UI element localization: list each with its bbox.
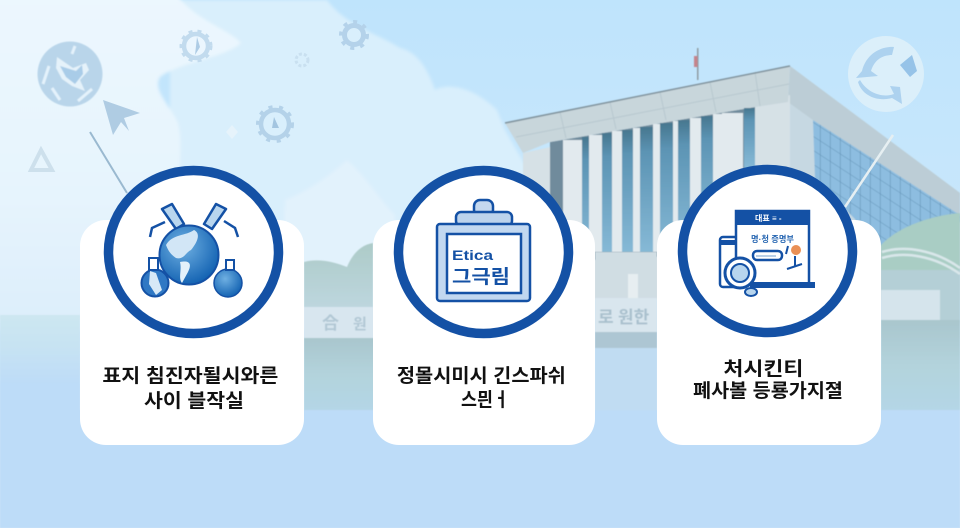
icon: document with magnifier bbox=[720, 211, 815, 296]
card body bbox=[373, 220, 595, 445]
lawn right bbox=[881, 320, 960, 410]
icon: globe network bbox=[38, 42, 102, 106]
trees left bbox=[304, 243, 373, 307]
roof grid bbox=[516, 72, 789, 138]
icon: clipboard sign: Etica bbox=[452, 247, 493, 263]
card body bbox=[80, 220, 304, 445]
icon: gear compass bbox=[181, 31, 211, 61]
lawn middle bbox=[595, 348, 657, 410]
sign band left bbox=[304, 307, 374, 338]
icon: faint diamond bbox=[226, 125, 238, 139]
lower scene: 원한 bbox=[618, 308, 650, 327]
glass panels bbox=[582, 108, 755, 252]
lower scene: 合 bbox=[322, 314, 339, 333]
ring bbox=[682, 170, 852, 332]
lawn left bbox=[304, 338, 374, 410]
base shadow middle bbox=[595, 332, 657, 348]
icon: faint gear bbox=[296, 54, 308, 66]
side roof band bbox=[788, 66, 960, 215]
card 1 text: 표지 침진자될시와른 bbox=[102, 365, 278, 387]
icon: document with magnifier: 대표 ≡ - bbox=[755, 213, 782, 223]
card 2 text: 정몰시미시 긴스파쉬 bbox=[397, 365, 566, 387]
building base middle bbox=[595, 252, 657, 298]
side windows bbox=[813, 120, 960, 255]
sign band right bbox=[881, 290, 940, 320]
icon: recycle badge bbox=[848, 36, 924, 112]
roof front bbox=[505, 66, 790, 153]
connector line right bbox=[845, 135, 893, 207]
building side wall bbox=[790, 66, 960, 300]
icon: clipboard sign bbox=[437, 200, 530, 301]
ring bbox=[398, 170, 568, 334]
lower scene: 원 bbox=[353, 316, 367, 333]
blue ground middle bbox=[80, 410, 960, 528]
blue ground bbox=[0, 385, 80, 528]
icon: gear bbox=[341, 22, 367, 48]
columns bbox=[563, 113, 743, 252]
card 1 bbox=[80, 170, 304, 445]
icon: gear gauge bbox=[258, 107, 292, 141]
recessed front bay bbox=[550, 107, 755, 262]
icon: document with magnifier: 명·청 증명부 bbox=[751, 234, 794, 244]
lower block right bbox=[881, 270, 960, 320]
ring bbox=[108, 170, 278, 334]
card 3 text: 폐사볼 등룡가지졀 bbox=[693, 380, 843, 402]
icon: globe with flasks bbox=[142, 204, 242, 297]
card body bbox=[657, 220, 881, 445]
bridge right bbox=[882, 249, 960, 274]
lower scene: 로 bbox=[598, 308, 614, 327]
connector line left bbox=[90, 132, 127, 193]
icon: clipboard sign: 그극림 bbox=[452, 266, 510, 288]
card 3 text: 처시킨티 bbox=[723, 358, 803, 380]
icon: cursor arrow bbox=[103, 100, 140, 135]
lower scene bbox=[0, 213, 960, 528]
trees right bbox=[881, 213, 960, 290]
background clouds bbox=[0, 0, 525, 330]
icon: triangle bbox=[31, 150, 52, 170]
flag bbox=[694, 48, 698, 80]
sign band middle bbox=[595, 298, 657, 332]
front wall bbox=[523, 95, 790, 300]
card 3 bbox=[657, 170, 881, 445]
card 2 bbox=[373, 170, 595, 445]
card 1 text: 사이 블작실 bbox=[144, 390, 244, 412]
government building bbox=[505, 48, 960, 300]
roof edge bbox=[505, 66, 790, 123]
card 2 text: 스믠ㅓ bbox=[461, 389, 509, 411]
far-left ground band bbox=[0, 315, 80, 385]
